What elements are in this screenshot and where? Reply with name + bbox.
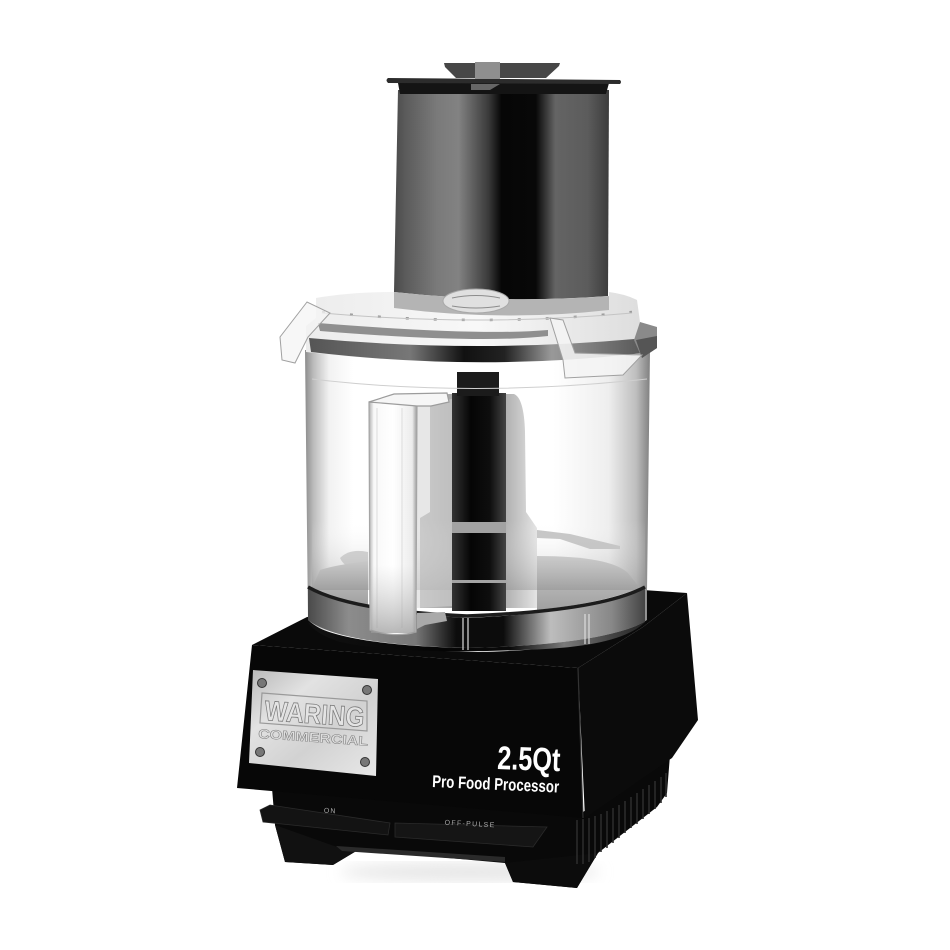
bowl bottom band [308, 588, 645, 648]
lid centre bump [443, 289, 509, 313]
lid top disc [306, 292, 650, 362]
bump highlight [452, 296, 500, 308]
lid ridge line [322, 313, 632, 320]
vents [577, 773, 666, 864]
brand subtitle: COMMERCIAL [258, 726, 369, 749]
shaft ring [452, 580, 506, 583]
lid dark band [309, 338, 646, 362]
lid inner band [318, 323, 548, 339]
feeder cylinder with lid [386, 62, 621, 316]
knob centre tab [475, 62, 500, 79]
brand name: WARING [264, 695, 366, 733]
base front face [237, 645, 583, 818]
left lid handle [280, 302, 330, 363]
base corner highlight [578, 668, 583, 818]
button: on [260, 805, 390, 835]
drive shaft [452, 393, 506, 611]
transparent bowl [305, 350, 650, 652]
shaft light band [452, 522, 506, 533]
front foot right [505, 853, 598, 888]
cylinder lid rim [386, 78, 621, 84]
right lid edge dark [636, 336, 657, 358]
shaft neck [457, 372, 499, 396]
central drive hub [420, 394, 537, 608]
handle inner wall [417, 399, 452, 608]
feed tube cylinder [394, 90, 609, 299]
bowl floor disc left [312, 561, 368, 606]
handle bridge [369, 393, 449, 406]
bowl lower band [308, 622, 645, 651]
bowl rim line [312, 379, 647, 388]
bowl body [305, 350, 650, 652]
bowl floor disc right [537, 556, 640, 610]
cylinder lid knob [444, 63, 560, 78]
bowl ribs [463, 614, 589, 650]
base under recess [336, 846, 505, 862]
motor base [237, 593, 698, 888]
handle latch [417, 612, 447, 629]
product name label: Pro Food Processor [432, 772, 560, 797]
blade right [537, 530, 620, 549]
base top surface [252, 590, 687, 668]
cylinder lower collar [394, 292, 610, 316]
right lid clip [550, 318, 642, 378]
bowl handle tube [369, 402, 417, 635]
bowl lower shading [312, 520, 645, 590]
blade left [340, 551, 368, 572]
lid latch [471, 84, 500, 90]
lid tick ridge [322, 312, 632, 320]
handle inner lines [377, 408, 402, 628]
floor shadow [340, 863, 600, 881]
off pulse label: OFF-PULSE [444, 820, 496, 829]
on label: ON [324, 808, 337, 815]
logo outline [260, 693, 367, 731]
screws [256, 678, 372, 766]
plate body [249, 670, 378, 776]
bowl bottom ring line [308, 587, 645, 616]
handle base shading [371, 565, 415, 633]
brand plate [249, 670, 378, 776]
base right face [578, 593, 698, 818]
base lower housing [272, 755, 670, 888]
right lid edge [634, 322, 657, 358]
front foot left [275, 825, 358, 865]
button: off pulse [395, 823, 547, 847]
cylinder lid underside [398, 83, 609, 94]
capacity label: 2.5Qt [497, 739, 561, 778]
bowl lid [280, 289, 657, 378]
